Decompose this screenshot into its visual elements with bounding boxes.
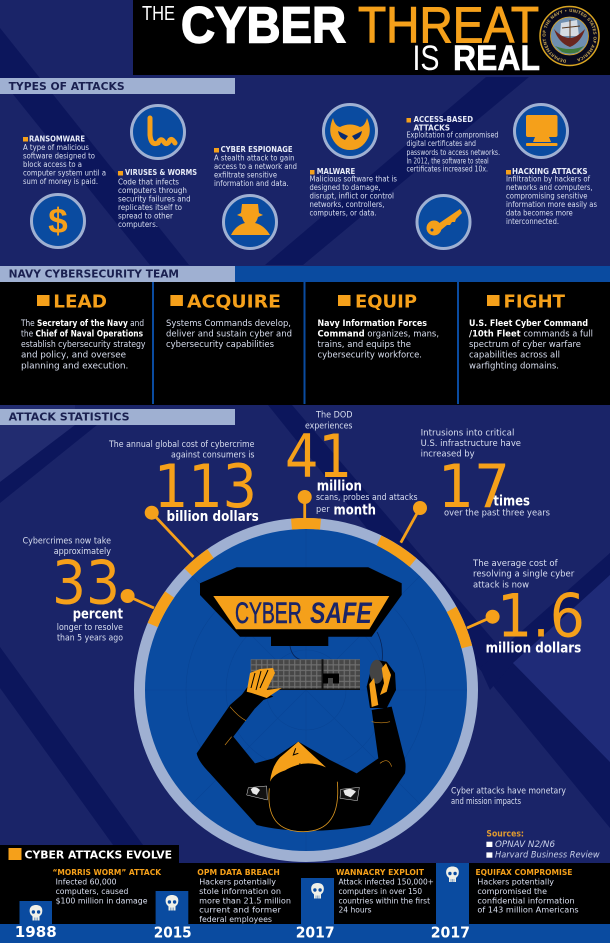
stat: 1.6 million: resolving a single cyber (473, 570, 575, 580)
panel: ransomware: sum of money is paid. (23, 177, 98, 186)
section bar: attack statistics: ATTACK STATISTICS (9, 411, 130, 424)
event: wannacry 2017: Attack infected 150,000+ (338, 878, 434, 887)
event: opm data breach 2015: OPM DATA BREACH (197, 868, 280, 877)
event: wannacry 2017: 2017 (296, 924, 335, 942)
equip column: Command organizes, mans, (318, 330, 439, 340)
stat: 1.6 million: million dollars (486, 641, 581, 657)
caption: impacts: and mission impacts (451, 797, 521, 807)
acquire column: Systems Commands develop, (166, 319, 291, 329)
panel: viruses and worms: replicates itself to (118, 203, 182, 212)
stat: 113 billion: 113 (154, 452, 257, 522)
lead column: planning and execution. (21, 362, 128, 372)
fight column: warfighting domains. (469, 362, 559, 372)
acquire column: cybersecurity capabilities (166, 340, 274, 350)
panel: viruses and worms (118, 106, 197, 229)
stat: 17 times: Intrusions into critical (421, 428, 514, 438)
panel: malware: designed to damage, (310, 183, 380, 192)
stat: 41 million: million (317, 479, 362, 495)
dial ring (140, 523, 472, 856)
event: wannacry 2017: countries within the first (338, 896, 430, 905)
event: opm data breach 2015: 2015 (154, 924, 192, 942)
illustration: right hand on mouse (367, 660, 396, 708)
event: equifax 2017 (431, 863, 579, 942)
illustration: left hand (247, 668, 282, 698)
pin connectors (121, 490, 500, 628)
illustration: monitor (200, 567, 402, 662)
event: equifax 2017: compromised the (477, 887, 547, 896)
stat: 41 million: per (316, 505, 330, 515)
icon: skull (446, 866, 459, 882)
panel: access-based attacks: certificates increased 10x. (406, 165, 488, 174)
event: morris worm 1988: $100 million in damage (56, 896, 148, 905)
event: morris worm 1988 (15, 868, 162, 941)
panel: access-based attacks: ATTACKS (414, 124, 450, 133)
stat: 33 percent: 33 (52, 548, 120, 618)
stat: 113 billion: billion dollars (166, 509, 259, 525)
panel: ransomware: computer system until a (23, 169, 106, 178)
lead column (20, 291, 146, 372)
panel: hacking attacks: compromising sensitive (506, 192, 588, 201)
timeline heading: CYBER ATTACKS EVOLVE (24, 848, 172, 861)
panel: access-based attacks: Exploitation of compromised (406, 131, 498, 140)
panel: ransomware: A type of malicious (23, 143, 89, 152)
lead column: The Secretary of the Navy and (20, 319, 144, 329)
panel: ransomware (23, 135, 106, 248)
event: opm data breach 2015: federal employees (199, 915, 272, 924)
stat: 41 million: 41 (285, 422, 352, 492)
stat: 113 billion (108, 440, 259, 525)
event: opm data breach 2015 (154, 868, 291, 942)
stat: 41 million: month (334, 502, 376, 518)
event: equifax 2017: Hackers potentially (477, 878, 554, 887)
title banner: REAL (453, 39, 540, 78)
title banner: IS (412, 39, 440, 78)
fight column: /10th Fleet commands a full (469, 330, 593, 340)
event: wannacry 2017: WANNACRY EXPLOIT (336, 868, 425, 877)
event: equifax 2017: confidential information (477, 896, 575, 905)
panel: hacking attacks (506, 104, 597, 226)
fight column: capabilities across all (469, 351, 560, 361)
stat: 113 billion: against consumers is (171, 451, 255, 461)
panel: hacking attacks: information more easily as (506, 200, 597, 209)
icon: skull (30, 905, 42, 920)
icon: navy seal: DEPARTMENT OF THE NAVY • UNITED STATES OF AMERICA (542, 8, 597, 63)
illustration: operator (197, 683, 406, 832)
section bar: attack statistics (0, 409, 235, 425)
panel: access-based attacks: digital certificates and (406, 139, 476, 148)
event: equifax 2017: EQUIFAX COMPROMISE (476, 868, 572, 877)
icon: devil face (324, 104, 376, 158)
illustration: monitor: SAFE (310, 597, 372, 630)
stat: 41 million: experiences (305, 422, 353, 432)
panel: team (0, 282, 610, 405)
illustration: keyboard (251, 659, 360, 690)
acquire column: ACQUIRE (187, 291, 281, 312)
equip column: Navy Information Forces (318, 319, 427, 329)
event: morris worm 1988: Infected 60,000 (56, 878, 117, 887)
stat: 17 times: increased by (421, 450, 475, 460)
sources: OPNAV N2/N6 (495, 840, 555, 850)
stat: 17 times: 17 (438, 452, 510, 522)
stat: 17 times: U.S. infrastructure have (421, 439, 521, 449)
event: wannacry 2017: computers in over 150 (338, 887, 422, 896)
panel: ransomware: software designed to (23, 152, 95, 161)
icon: key (417, 196, 470, 248)
caption: impacts (451, 786, 567, 807)
panel: viruses and worms: computers through (118, 186, 187, 195)
panel: cyber espionage: A stealth attack to gain (214, 154, 294, 162)
stat: 17 times: over the past three years (444, 509, 550, 519)
panel: viruses and worms: VIRUSES & WORMS (125, 168, 197, 177)
sources (486, 830, 600, 861)
lead column: the Chief of Naval Operations (21, 330, 143, 340)
panel: malware: networks, controllers, (310, 200, 384, 209)
title banner: THE (142, 3, 175, 25)
caption: impacts: Cyber attacks have monetary (451, 786, 567, 796)
lead column: LEAD (53, 291, 107, 312)
panel: malware (310, 104, 397, 218)
stat: 33 percent: Cybercrimes now take (23, 536, 111, 546)
event: wannacry 2017: 24 hours (338, 906, 372, 915)
panel: hacking attacks: data becomes more (506, 208, 573, 218)
icon: skull (311, 883, 324, 898)
panel: viruses and worms: computers. (118, 220, 158, 229)
icon: dollar sign: $ (48, 202, 68, 241)
panel: malware: Malicious software that is (310, 175, 397, 184)
fight column (469, 291, 593, 372)
panel: access-based attacks (406, 115, 500, 248)
stat: 1.6 million: 1.6 (497, 582, 585, 652)
fight column: FIGHT (504, 291, 566, 312)
sources: Harvard Business Review (495, 851, 600, 861)
stat: 33 percent: than 5 years ago (57, 634, 123, 644)
stat: 41 million (285, 411, 418, 518)
illustration: monitor: CYBER (235, 597, 302, 630)
panel: viruses and worms: Code that infects (118, 177, 179, 186)
panel: cyber espionage: CYBER ESPIONAGE (221, 145, 293, 154)
event: opm data breach 2015: more than 21.5 million (199, 896, 291, 905)
event: equifax 2017: of 143 million Americans (477, 906, 579, 915)
stat: 41 million: scans, probes and attacks (316, 493, 418, 503)
event: wannacry 2017 (296, 868, 434, 942)
stat: 17 times: times (493, 493, 530, 509)
panel: viruses and worms: spread to other (118, 212, 174, 220)
section bar: types of attacks: TYPES OF ATTACKS (9, 80, 125, 93)
icon: worm (132, 106, 184, 158)
panel: malware: computers, or data. (310, 208, 376, 218)
lead column: establish cybersecurity strategy (21, 340, 146, 350)
panel: hacking attacks: Infiltration by hackers of (506, 175, 590, 184)
event: opm data breach 2015: Hackers potentially (199, 878, 276, 887)
fight column: spectrum of cyber warfare (469, 340, 581, 350)
stat: 33 percent (23, 536, 123, 644)
panel: cyber espionage: information and data. (214, 179, 289, 188)
event: morris worm 1988: “MORRIS WORM” ATTACK (52, 868, 162, 877)
lead column: and policy, and oversee (21, 351, 126, 361)
equip column: trains, and equips the (318, 340, 411, 350)
event: morris worm 1988: computers, caused (56, 887, 128, 896)
event: opm data breach 2015: current and former (199, 906, 282, 915)
equip column (318, 291, 439, 361)
stat: 113 billion: The annual global cost of cybercrime (108, 440, 255, 450)
panel: access-based attacks: passwords to access networks. (406, 148, 500, 157)
stat: 1.6 million: attack is now (473, 580, 529, 590)
stat: 33 percent: percent (73, 606, 123, 622)
icon: computer (514, 104, 568, 158)
panel: hacking attacks: interconnected. (506, 217, 559, 226)
panel: viruses and worms: security failures and (118, 194, 191, 203)
acquire column (166, 291, 292, 350)
stat: 1.6 million: The average cost of (472, 559, 558, 569)
timeline band (0, 863, 610, 943)
panel: cyber espionage: exfiltrate sensitive (214, 170, 277, 180)
panel: cyber espionage: access to a network and (214, 162, 297, 171)
stat: 41 million: The DOD (315, 411, 353, 421)
fight column: U.S. Fleet Cyber Command (469, 319, 588, 329)
icon: spy (224, 196, 276, 248)
panel: hacking attacks: networks and computers, (506, 183, 593, 192)
acquire column: deliver and sustain cyber and (166, 330, 292, 340)
panel: ransomware: block access to a (23, 160, 82, 169)
event: morris worm 1988: 1988 (15, 923, 57, 941)
stat: 17 times (421, 428, 550, 522)
panel: cyber espionage (214, 145, 297, 248)
section bar: navy cybersecurity team (0, 266, 610, 282)
event: equifax 2017: 2017 (431, 924, 470, 942)
equip column: EQUIP (355, 291, 417, 312)
icon: skull (166, 895, 178, 910)
equip column: cybersecurity workforce. (318, 351, 422, 361)
panel: access-based attacks: In 2012, the software to steal (406, 156, 489, 165)
timeline heading (0, 845, 179, 863)
panel: malware: MALWARE (317, 167, 355, 176)
section bar: navy cybersecurity team: NAVY CYBERSECURITY TEAM (9, 268, 179, 281)
panel: hacking attacks: HACKING ATTACKS (512, 167, 588, 176)
event: opm data breach 2015: stole information on (199, 887, 281, 896)
section bar: types of attacks (0, 78, 235, 94)
sources: Sources: (486, 830, 524, 840)
stat: 33 percent: longer to resolve (57, 623, 123, 633)
title banner (133, 0, 610, 78)
panel: access-based attacks: ACCESS-BASED (414, 115, 473, 124)
stat: 33 percent: approximately (54, 547, 112, 557)
stat: 1.6 million (472, 559, 585, 657)
panel: ransomware: RANSOMWARE (29, 135, 85, 144)
panel: malware: disrupt, inflict or control (310, 192, 394, 201)
